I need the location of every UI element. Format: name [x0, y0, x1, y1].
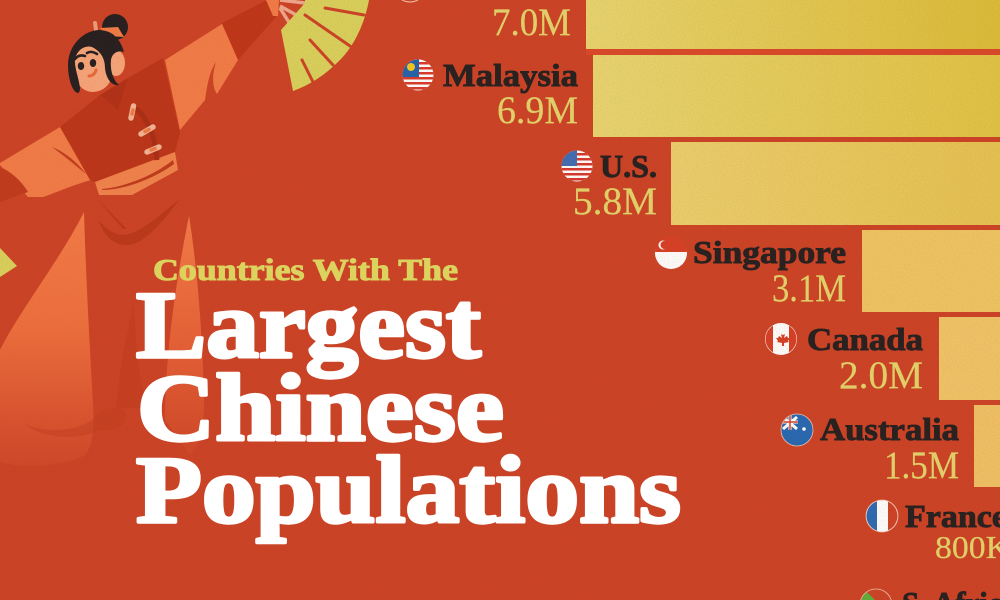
value: Canada: 2.0M — [839, 354, 923, 397]
frog buttons — [131, 106, 159, 152]
bar: Singapore — [862, 230, 1000, 312]
bar: U.S. — [671, 142, 1000, 225]
flag: Singapore — [655, 236, 687, 269]
bar: Malaysia — [593, 55, 1000, 137]
right sleeve — [165, 24, 238, 130]
value: Singapore: 3.1M — [772, 267, 846, 310]
flag: U.S. — [561, 150, 593, 182]
bar: Australia — [974, 405, 1000, 487]
torso — [60, 58, 180, 182]
flag: Australia — [781, 414, 813, 446]
value: Australia: 1.5M — [884, 444, 959, 487]
flag: Canada — [765, 323, 797, 355]
left sleeve — [0, 127, 91, 197]
flag: France — [866, 500, 898, 532]
fan left — [0, 248, 17, 277]
flag: South Africa — [860, 589, 892, 600]
bar: 7.0M — [586, 0, 1000, 49]
heading line 1: Largest — [136, 272, 481, 378]
right forearm — [222, 0, 276, 60]
value: top row: 7.0M — [492, 1, 571, 44]
collar — [100, 78, 128, 110]
value: U.S.: 5.8M — [573, 180, 657, 223]
robe folds — [97, 199, 180, 245]
belt — [95, 152, 178, 195]
heading line 2: Chinese — [137, 355, 504, 461]
skirt panels — [0, 212, 204, 466]
label: Singapore: Singapore — [693, 234, 846, 270]
heading line 3: Populations — [136, 437, 681, 543]
head — [68, 14, 128, 93]
flag: top row — [394, 0, 426, 2]
flag: Malaysia — [402, 59, 434, 91]
row separators — [586, 49, 1000, 55]
bar chart — [586, 0, 1000, 487]
left forearm — [0, 167, 28, 202]
label: France: France — [905, 498, 1000, 534]
illustration: dancer with fans — [0, 0, 369, 466]
bar: Canada — [939, 317, 1000, 400]
title block — [136, 252, 681, 543]
hand — [266, 0, 279, 16]
label: Malaysia: Malaysia — [443, 57, 578, 93]
label: U.S.: U.S. — [600, 148, 657, 184]
kicker: Countries With The — [153, 252, 458, 287]
label: Canada: Canada — [807, 321, 923, 357]
value: Malaysia: 6.9M — [497, 89, 578, 132]
left sleeve fold — [52, 147, 86, 174]
fan right — [280, 0, 369, 91]
label: Australia: Australia — [820, 411, 959, 447]
